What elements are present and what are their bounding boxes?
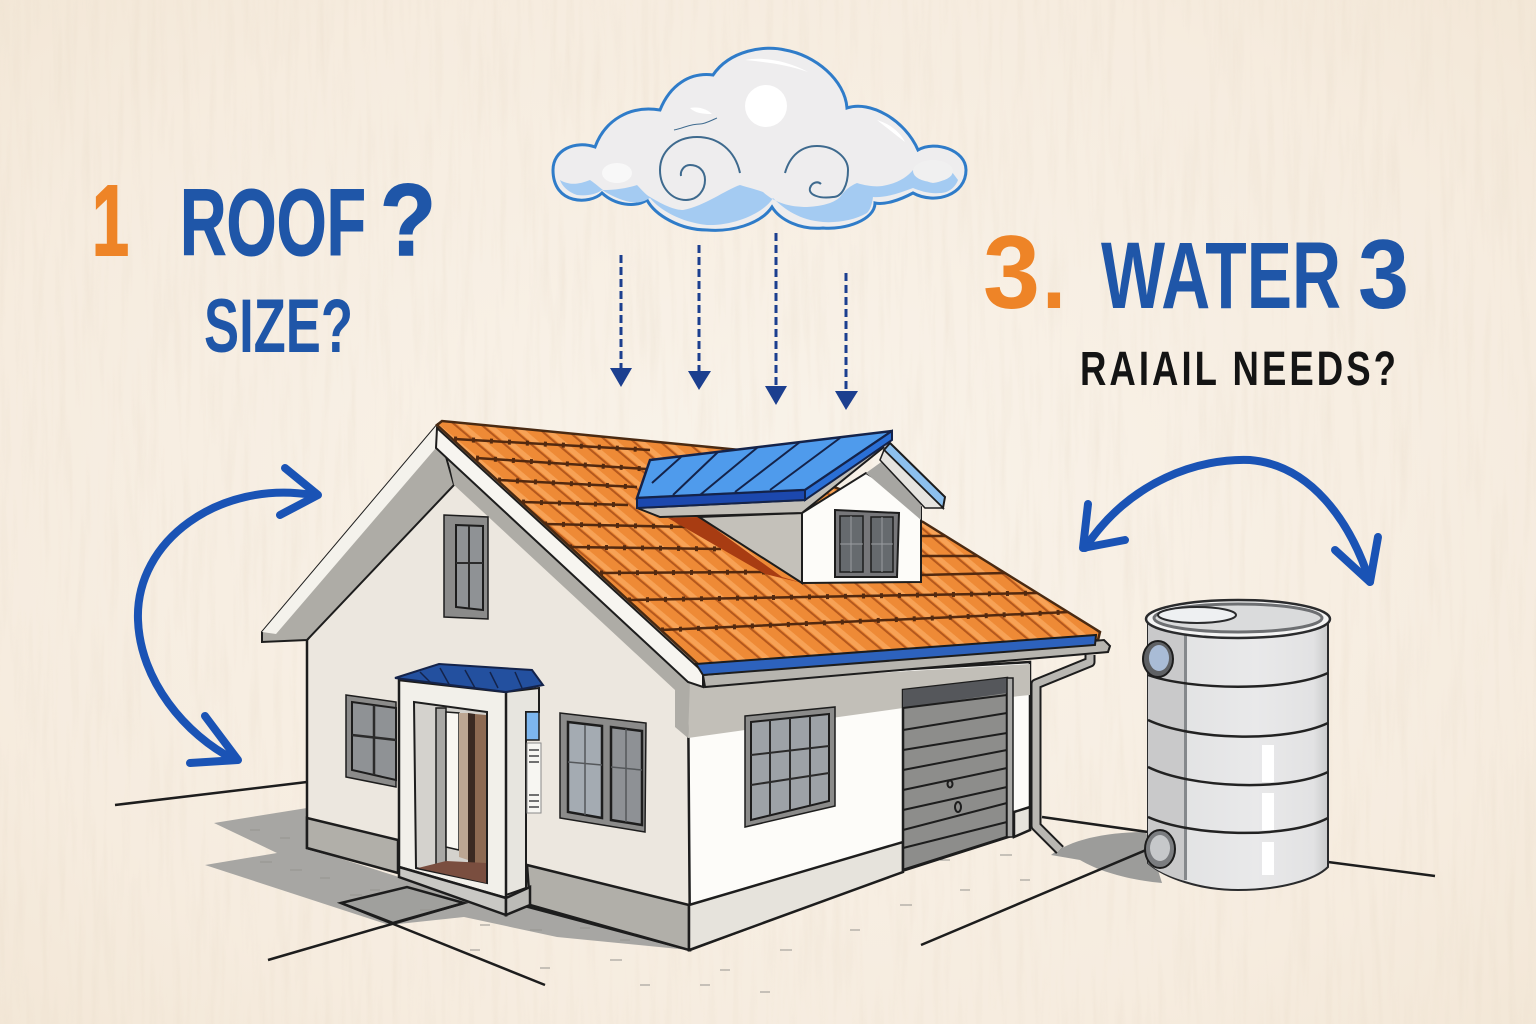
arrow: right curved double arrow: [1083, 460, 1378, 582]
porch: [395, 664, 543, 915]
heading: 1 roof size: 1: [92, 165, 129, 277]
wall: front gable: [307, 465, 690, 950]
wall base: [307, 807, 1030, 950]
garage door: [903, 678, 1013, 870]
window: side wall: [745, 707, 835, 827]
heading: 3 water needs: 3: [1358, 219, 1409, 329]
heading: 3 water needs: [983, 215, 1409, 396]
arrows: rain: [610, 233, 858, 410]
heading: 1 roof size: [92, 163, 436, 369]
house: [262, 421, 1110, 950]
dormer: [637, 431, 945, 583]
heading: 3 water needs: WATER: [1101, 223, 1341, 329]
heading: 3 water needs: RAIAIL NEEDS?: [1080, 343, 1399, 396]
icon: cloud: [553, 48, 966, 230]
heading: 1 roof size: ?: [380, 163, 436, 277]
window: left: [346, 695, 396, 787]
heading: 3 water needs: .: [1042, 215, 1066, 331]
roof: [437, 421, 1100, 665]
wall: side: [688, 662, 1030, 950]
water tank: [1143, 600, 1330, 890]
heading: 1 roof size: SIZE?: [204, 284, 353, 369]
heading: 1 roof size: ROOF: [180, 170, 366, 276]
arrow: left curved double arrow: [138, 468, 318, 763]
port: lower: [1145, 830, 1175, 868]
gutter: [696, 635, 1110, 687]
window: front right: [560, 713, 646, 832]
downpipe: [1036, 655, 1090, 850]
port: upper: [1143, 641, 1173, 677]
heading: 3 water needs: 3: [983, 215, 1040, 331]
ground lines and shadows: [115, 782, 1435, 992]
window: upper gable: [444, 515, 488, 619]
gable trim: [262, 425, 703, 738]
